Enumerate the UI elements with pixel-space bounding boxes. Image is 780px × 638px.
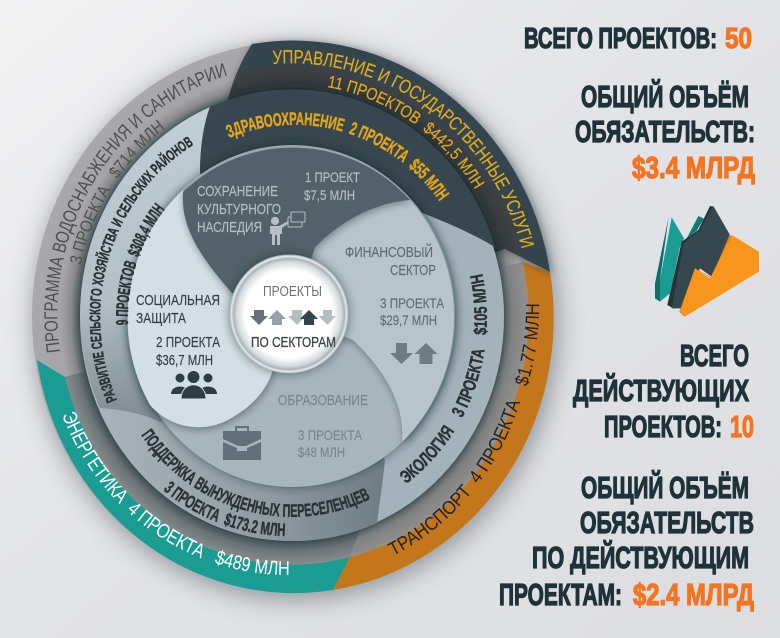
label: ecology: ЭКОЛОГИЯ 3 ПРОЕКТА $105 МЛН bbox=[400, 274, 488, 483]
label: governance: 11 ПРОЕКТОВ $442,5 МЛН bbox=[328, 76, 485, 189]
sector: agriculture bbox=[80, 107, 292, 422]
panel: middle ring bbox=[80, 89, 504, 541]
stat: active projects bbox=[573, 338, 754, 444]
center label: ПРОЕКТЫ bbox=[263, 283, 322, 300]
sector: cultural heritage bbox=[183, 148, 410, 316]
strip: energy inner band bbox=[65, 317, 362, 565]
label: agriculture: РАЗВИТИЕ СЕЛЬСКОГО ХОЗЯЙСТВА И СЕЛЬСКИХ РАЙОНОВ bbox=[89, 136, 193, 404]
center label: ПО СЕКТОРАМ bbox=[251, 334, 336, 351]
label: transport: $1.77 МЛН bbox=[514, 304, 540, 386]
sector: water and sanitation bbox=[32, 42, 552, 592]
text: education: ОБРАЗОВАНИЕ bbox=[278, 392, 368, 409]
icon: arrows row bbox=[250, 310, 336, 325]
text: social protection: СОЦИАЛЬНАЯ bbox=[136, 292, 220, 309]
text: finance: $29,7 МЛН bbox=[380, 312, 437, 328]
label: displaced persons: 3 ПРОЕКТА $173.2 МЛН bbox=[164, 481, 286, 536]
label: agriculture: 9 ПРОЕКТОВ $308,4 МЛН bbox=[116, 202, 165, 325]
chart: sector wheel bbox=[32, 41, 554, 593]
icon: finance arrows bbox=[390, 343, 438, 364]
panel: outer ring bbox=[32, 41, 554, 593]
stat: active commitments bbox=[499, 469, 754, 612]
sector: social protection bbox=[128, 190, 292, 427]
center label bbox=[250, 283, 336, 351]
strip: transport inner band bbox=[292, 262, 529, 557]
sector: healthcare bbox=[200, 89, 495, 317]
icon: logo bbox=[655, 206, 759, 317]
text: social protection: 2 ПРОЕКТА bbox=[156, 334, 220, 351]
sector: energy bbox=[37, 317, 350, 593]
icon: briefcase bbox=[223, 426, 261, 460]
text: cultural heritage: $7,5 МЛН bbox=[304, 187, 355, 203]
stat: total commitments bbox=[575, 78, 755, 185]
label: displaced persons: ПОДДЕРЖКА ВЫНУЖДЕННЫХ ПЕРЕСЕЛЕНЦЕВ bbox=[141, 428, 370, 518]
text: finance: СЕКТОР bbox=[390, 262, 436, 279]
stat: active commitments: ПРОЕКТАМ: bbox=[499, 577, 622, 612]
text: cultural heritage bbox=[197, 169, 360, 236]
label: governance: УПРАВЛЕНИЕ И ГОСУДАРСТВЕННЫЕ УСЛУГИ bbox=[272, 50, 534, 248]
label: water and sanitation: ПРОГРАММА ВОДОСНАБЖЕНИЯ И САНИТАРИИ bbox=[44, 63, 227, 352]
sector: education bbox=[129, 145, 455, 487]
text: education: $48 МЛН bbox=[298, 444, 345, 460]
sector: finance bbox=[292, 200, 454, 442]
sector: displaced persons bbox=[100, 317, 385, 541]
icon: presenter bbox=[270, 212, 305, 245]
text: cultural heritage: СОХРАНЕНИЕ bbox=[197, 183, 278, 200]
text: finance bbox=[345, 243, 445, 328]
text: finance: 3 ПРОЕКТА bbox=[380, 295, 445, 311]
stat: active projects: 10 bbox=[730, 409, 754, 444]
icon: people bbox=[171, 371, 217, 399]
label: transport: ТРАНСПОРТ 4 ПРОЕКТА bbox=[387, 402, 520, 554]
sector: governance bbox=[227, 41, 550, 317]
text: social protection: $36,7 МЛН bbox=[156, 352, 213, 369]
center circle bbox=[230, 254, 348, 374]
sector: ecology bbox=[80, 93, 504, 541]
text: education: 3 ПРОЕКТА bbox=[298, 427, 363, 443]
stat: total projects: 50 bbox=[725, 23, 752, 55]
wheel shadow bbox=[34, 45, 558, 599]
label: transport bbox=[387, 304, 540, 554]
text: cultural heritage: 1 ПРОЕКТ bbox=[305, 169, 360, 185]
text: education bbox=[278, 392, 368, 460]
text: cultural heritage: КУЛЬТУРНОГО bbox=[197, 201, 281, 218]
label: healthcare: ЗДРАВООХРАНЕНИЕ 2 ПРОЕКТА $55 МЛН bbox=[226, 112, 450, 202]
text: finance: ФИНАНСОВЫЙ bbox=[345, 243, 433, 261]
text: social protection: ЗАЩИТА bbox=[136, 310, 186, 327]
sector: transport bbox=[333, 262, 554, 590]
label: water and sanitation: 3 ПРОЕКТА $714 МЛН bbox=[70, 120, 164, 264]
panel: inner disc bbox=[128, 145, 455, 487]
text: cultural heritage: НАСЛЕДИЯ bbox=[197, 219, 262, 236]
label: energy: ЭНЕРГЕТИКА 4 ПРОЕКТА $489 МЛН bbox=[63, 412, 289, 575]
text: social protection bbox=[136, 292, 220, 369]
